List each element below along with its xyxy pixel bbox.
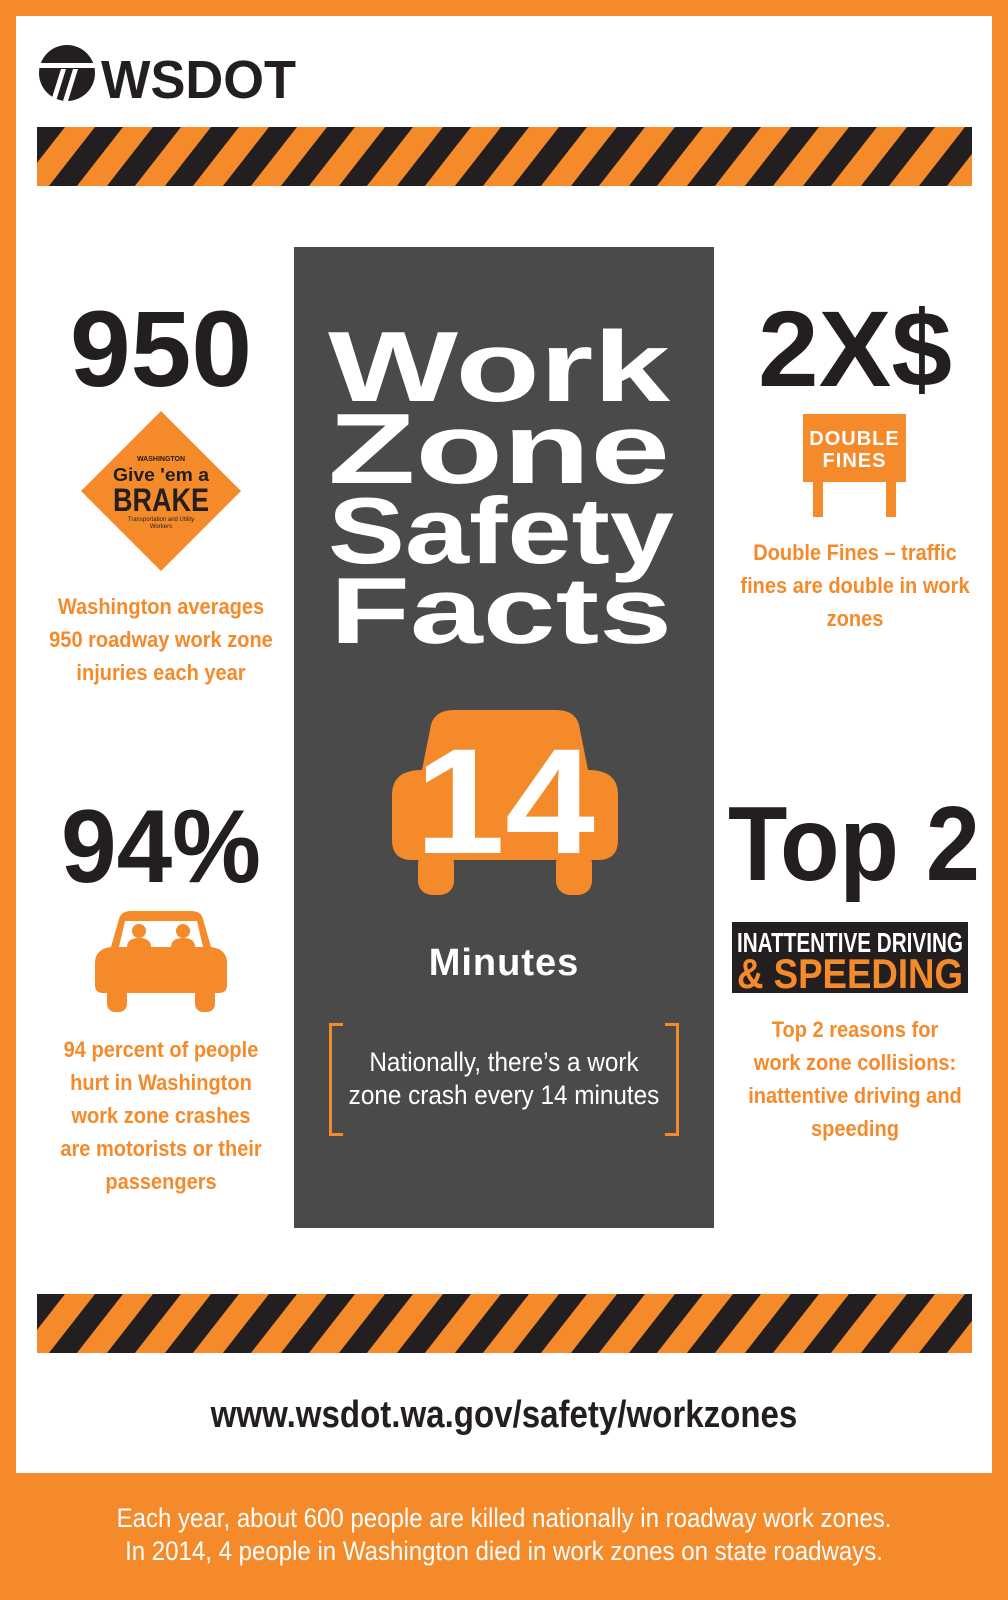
text: top 2 reasons: Top 2 reasons for xyxy=(772,1017,938,1042)
text: double fines: fines are double in work xyxy=(740,573,970,598)
text: top 2 reasons: inattentive driving and xyxy=(748,1083,962,1108)
text: 94 percent: 94 percent of people xyxy=(64,1037,258,1062)
text: 950 injuries: Washington averages xyxy=(58,594,264,619)
icon: car with 14: 14 xyxy=(415,717,595,885)
callout: bracket text xyxy=(329,1023,679,1136)
title: Safety xyxy=(328,478,674,583)
text: 950 injuries: 950 roadway work zone xyxy=(49,627,273,652)
title: Facts xyxy=(330,558,672,663)
url: www.wsdot.wa.gov/safety/workzones xyxy=(211,1394,797,1436)
text: double fines: Double Fines – traffic xyxy=(753,540,957,565)
text: 94 percent xyxy=(60,1037,262,1194)
text: 94 percent: work zone crashes xyxy=(71,1103,251,1128)
title: Work xyxy=(328,311,671,423)
footer text: Each year, about 600 people are killed nationally in roadway work zones. xyxy=(117,1503,891,1533)
callout: bracket text: zone crash every 14 minutes xyxy=(349,1080,659,1110)
text: top 2 reasons: speeding xyxy=(811,1116,899,1141)
label: Minutes: Minutes xyxy=(429,942,579,984)
title: Zone xyxy=(328,393,670,505)
text: 94 percent: are motorists or their xyxy=(60,1136,262,1161)
text: double fines xyxy=(740,540,970,631)
icon: Give 'em a BRAKE diamond: Workers xyxy=(150,524,172,530)
icon: car with passengers xyxy=(95,911,227,1012)
text: 94 percent: passengers xyxy=(105,1169,217,1194)
text: top 2 reasons: work zone collisions: xyxy=(754,1050,956,1075)
callout: bracket text: Nationally, there’s a work xyxy=(369,1047,639,1077)
icon: Give 'em a BRAKE diamond: BRAKE xyxy=(113,482,209,518)
icon: double fines sign: FINES xyxy=(823,450,886,472)
title xyxy=(328,311,674,663)
icon: Give 'em a BRAKE diamond: Give 'em a xyxy=(113,465,210,485)
icon: Give 'em a BRAKE diamond xyxy=(81,411,241,571)
icon: Give 'em a BRAKE diamond: WASHINGTON xyxy=(137,456,185,463)
footer text xyxy=(117,1503,891,1566)
hazard stripe band top xyxy=(37,127,972,186)
text: 94 percent: hurt in Washington xyxy=(70,1070,252,1095)
badge: inattentive driving & speeding xyxy=(732,922,968,993)
hazard stripe band bottom xyxy=(37,1294,972,1353)
text: double fines: zones xyxy=(827,606,883,631)
icon: double fines sign xyxy=(803,414,906,517)
text: 950 injuries xyxy=(49,594,273,685)
icon: double fines sign: DOUBLE xyxy=(809,428,900,450)
icon: car with 14 xyxy=(392,710,618,895)
footer text: In 2014, 4 people in Washington died in work zones on state roadways. xyxy=(125,1536,883,1566)
text: top 2 reasons xyxy=(748,1017,962,1141)
icon: Give 'em a BRAKE diamond: Transportation and Utility xyxy=(128,517,194,523)
text: 950 injuries: injuries each year xyxy=(76,660,246,685)
logo: WSDOT xyxy=(39,45,296,103)
center dark panel xyxy=(294,247,714,1228)
